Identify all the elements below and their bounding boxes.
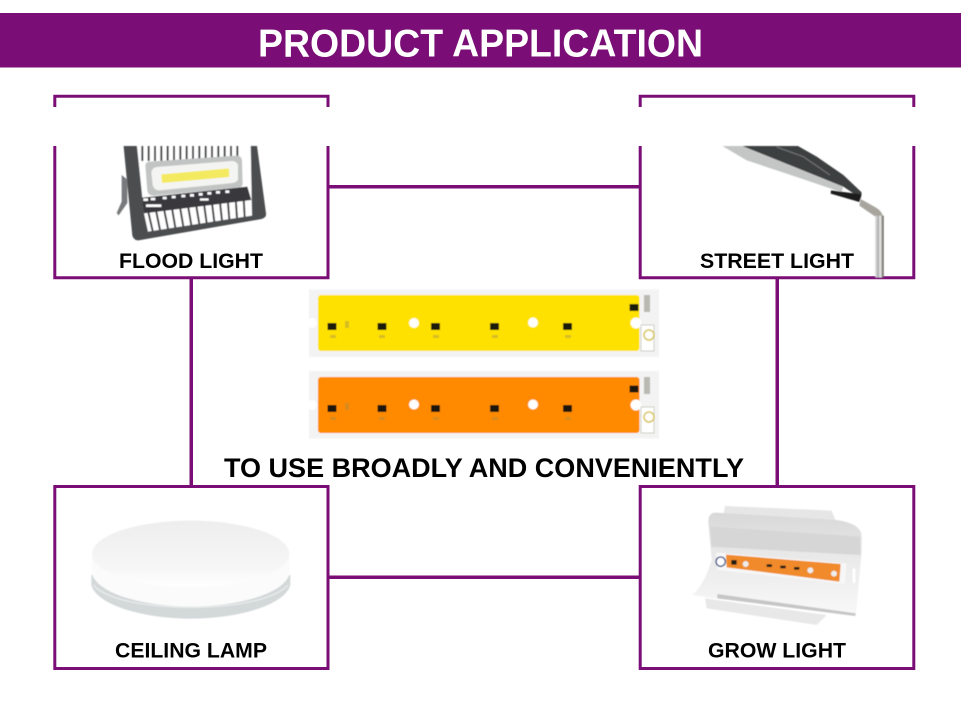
label: street light: STREET LIGHT	[700, 249, 854, 273]
title banner	[0, 13, 961, 68]
icon: ceiling lamp	[91, 521, 290, 619]
label: flood light: FLOOD LIGHT	[119, 249, 263, 273]
connector lines	[190, 185, 779, 579]
panel: street light	[640, 96, 914, 278]
icon: street light	[721, 144, 884, 278]
label: grow light: GROW LIGHT	[708, 638, 846, 662]
panel frame: street light	[640, 96, 914, 278]
icon: grow light	[692, 506, 862, 625]
label: ceiling lamp: CEILING LAMP	[115, 638, 267, 662]
panel: LED chips	[307, 290, 659, 438]
title banner: PRODUCT APPLICATION	[258, 22, 703, 66]
tagline: TO USE BROADLY AND CONVENIENTLY	[224, 453, 744, 483]
panel: grow light	[640, 486, 914, 668]
LED board: yellow	[307, 290, 659, 357]
panel frame: ceiling lamp	[55, 486, 328, 668]
icon: flood light	[117, 143, 266, 240]
LED board: orange	[307, 371, 659, 438]
panel: ceiling lamp	[55, 486, 328, 668]
panel frame: flood light	[55, 96, 328, 278]
panel frame: grow light	[640, 486, 914, 668]
panel: flood light	[55, 96, 328, 278]
